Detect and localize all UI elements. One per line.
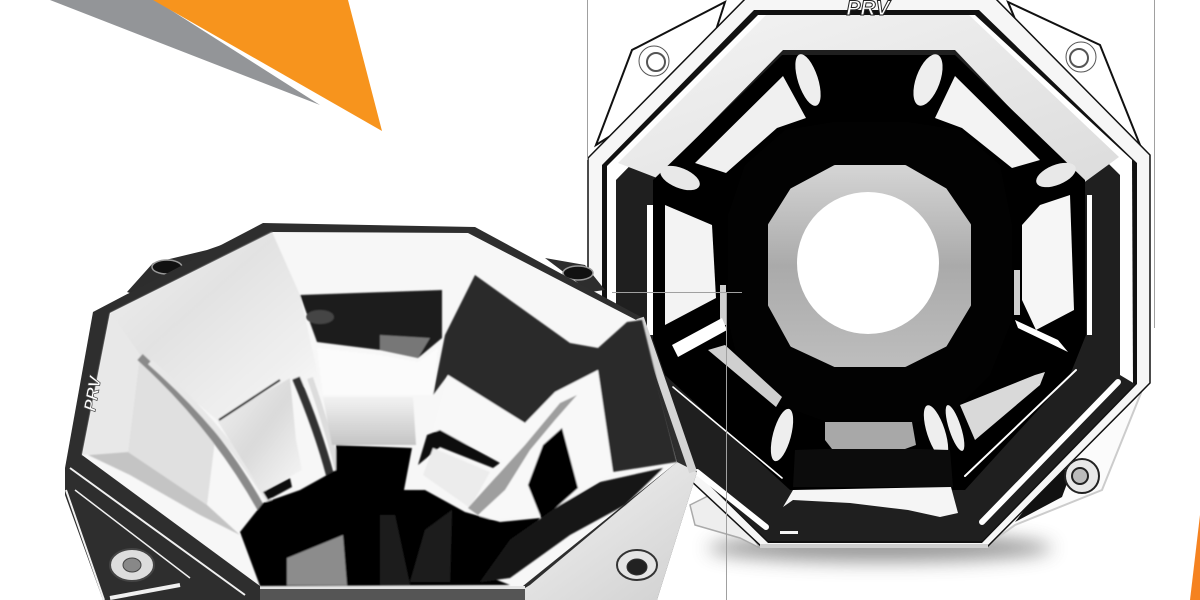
lower right bolt — [617, 550, 657, 580]
central hole — [797, 192, 939, 334]
throat grey reflection — [287, 535, 347, 585]
right inner chrome strip — [1014, 270, 1020, 315]
floor shadow — [708, 534, 1052, 562]
top right ear — [545, 258, 605, 292]
dimple — [306, 310, 334, 324]
right black reflection — [528, 428, 578, 520]
centre lower facet — [323, 397, 416, 445]
lower right rib dark — [480, 468, 663, 582]
lower right white facet — [423, 448, 490, 508]
top panel ovals — [790, 51, 949, 109]
throat dark panels — [380, 510, 452, 585]
centre upper dark band — [300, 290, 442, 358]
outer body — [65, 223, 697, 600]
side white wedges — [672, 318, 1068, 357]
facet black line — [219, 380, 280, 420]
small black patch — [263, 478, 292, 500]
right rib — [468, 395, 577, 515]
lower diagonal white stripes — [673, 370, 1118, 527]
upper left chrome panel — [695, 76, 806, 173]
chrome strip beside rib — [310, 378, 338, 470]
lower right ear — [987, 385, 1141, 545]
bowl facets softened — [82, 232, 677, 586]
lower right bolt — [1065, 459, 1099, 493]
lower rim light line — [260, 586, 525, 589]
central black throat — [728, 122, 1012, 425]
left lower facet — [128, 355, 215, 505]
outer chrome octagon — [588, 0, 1150, 547]
lower left chrome strip — [708, 345, 782, 407]
left horn: angled view — [65, 223, 697, 600]
left rib dark strip — [296, 378, 330, 475]
white rim band — [607, 15, 1133, 534]
right horn: front view — [588, 0, 1150, 562]
left rib highlight — [150, 362, 272, 505]
bottom silver lip — [760, 544, 988, 548]
small glint — [780, 531, 798, 534]
left chrome panel — [665, 205, 716, 325]
left inner chrome strip — [720, 285, 726, 325]
upper right white facet — [433, 370, 613, 520]
lower right flange — [505, 462, 697, 600]
lower right ear black wedge — [1015, 470, 1072, 522]
left rib silver band — [140, 357, 262, 510]
centre white facet — [317, 348, 438, 395]
top left ear bolt — [152, 260, 182, 274]
far left facet — [82, 313, 140, 455]
lower left arc — [88, 452, 240, 535]
right chrome panel — [1022, 195, 1074, 330]
bottom white reflection — [783, 487, 958, 517]
top mounting ears outline — [596, 2, 1140, 145]
bottom grey panel — [825, 422, 916, 449]
lower left ear remnant — [690, 490, 760, 548]
main dark face — [606, 26, 1135, 541]
top right ear bolt — [563, 266, 593, 280]
lower left flange stripes — [66, 468, 245, 600]
upper right chrome panel — [935, 76, 1040, 168]
black strip over right facet — [418, 430, 500, 468]
lower left bolt — [110, 549, 154, 581]
bottom black trapezoid — [793, 449, 953, 487]
decorative orange and grey corner triangles — [50, 0, 382, 131]
lower ovals — [766, 403, 968, 463]
thin crop guide lines — [588, 0, 1154, 600]
black band around inner panels — [653, 55, 1086, 490]
lower right chrome strip — [960, 372, 1045, 440]
logo on left rim: PRV — [80, 373, 105, 413]
upper left bolt — [639, 46, 669, 76]
throat black — [240, 445, 540, 586]
centre grey reflection — [380, 335, 430, 358]
side stripes — [647, 195, 1092, 335]
upper right bolt — [1066, 42, 1096, 72]
grey inner octagon — [770, 167, 969, 365]
large right dark panel — [433, 275, 677, 472]
upper corner ovals — [657, 158, 1079, 195]
dark rim octagon — [602, 10, 1137, 543]
upper left facet — [110, 232, 323, 420]
orange corner sliver — [1190, 515, 1200, 600]
top left ear — [127, 235, 250, 300]
middle left facet — [217, 378, 302, 492]
lower rim strip — [260, 588, 525, 600]
upper light face — [618, 15, 1119, 184]
right rim silver edge — [640, 318, 693, 472]
bowl base — [82, 232, 677, 586]
